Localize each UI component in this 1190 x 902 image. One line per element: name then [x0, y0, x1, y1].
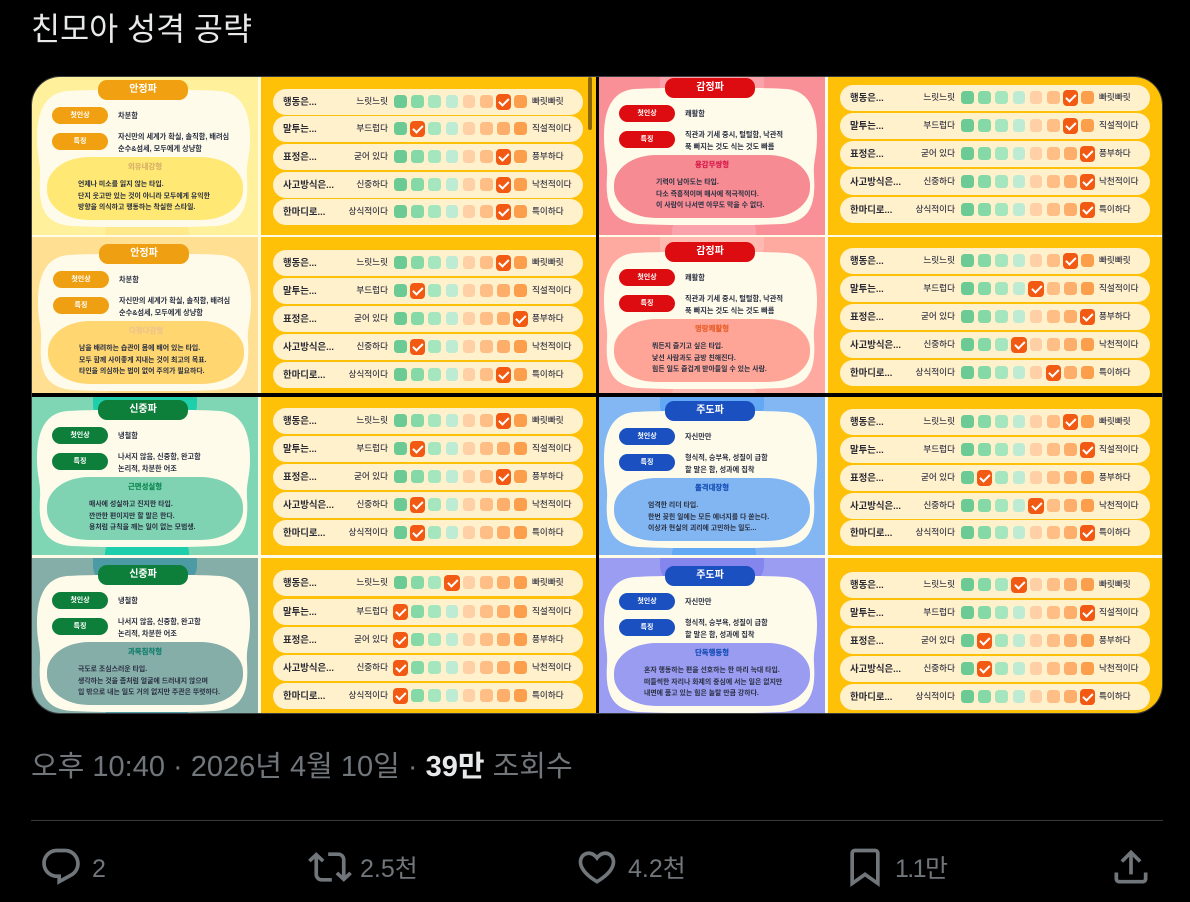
rating row: 한마디로 [273, 362, 583, 388]
rating row: 표정은: 풍부하다 [532, 471, 564, 481]
rating row: 행동은 [840, 572, 1150, 598]
panel: 안정파 다정다감형 profile: 타인을 의심하는 법이 없어 주의가 필요하다. [79, 368, 205, 375]
rating row: 한마디로: 특이하다 [1099, 527, 1131, 537]
panel: 주도파 단독행동형 profile: 특징 [641, 624, 653, 631]
rating row: 한마디로: 특이하다 [532, 527, 564, 537]
icon: bookmark [850, 848, 880, 887]
rating row: 표정은: 풍부하다 [1099, 148, 1131, 158]
rating row: 한마디로: 특이하다 [1099, 367, 1131, 377]
panel: 신중파 과묵침착형 ratings [261, 558, 596, 713]
panel: 신중파 과묵침착형 profile: 극도로 조심스러운 타입. [78, 666, 147, 673]
panel: 신중파 근면성실형 profile: 특징 [74, 458, 86, 465]
rating row: 한마디로: 한마디로... [283, 206, 325, 217]
rating row: 행동은: 행동은... [850, 92, 884, 103]
rating row: 행동은: 빠릿빠릿 [532, 257, 564, 267]
panel: 안정파 다정다감형 profile: 첫인상 [71, 276, 91, 283]
panel: 신중파 근면성실형 profile: 깐깐한 편이지만 할 말은 한다. [89, 513, 175, 520]
rating row: 한마디로: 특이하다 [532, 369, 564, 379]
panel: 감정파 용감무쌍형 profile: 푹 빠지는 것도 식는 것도 빠름 [685, 142, 774, 150]
rating row: 한마디로 [840, 197, 1150, 223]
panel: 감정파 명랑쾌활형 profile [599, 237, 825, 393]
rating row: 표정은: 표정은... [283, 471, 317, 482]
rating row: 표정은: 풍부하다 [1099, 311, 1131, 321]
panel: 감정파 명랑쾌활형 profile: 특징 [641, 300, 653, 307]
like count: 4.2천 [628, 855, 686, 883]
panel: 안정파 외유내강형 profile [32, 77, 258, 235]
rating row: 말투는 [840, 437, 1150, 463]
rating row: 행동은 [273, 408, 583, 434]
rating row: 사고방식은: 신중하다 [923, 176, 955, 186]
rating row: 행동은: 행동은... [850, 579, 884, 590]
panel: 감정파 명랑쾌활형 profile: 낯선 사람과도 금방 친해진다. [652, 355, 736, 362]
panel: 감정파 용감무쌍형 profile [599, 77, 825, 235]
panel: 안정파 다정다감형 profile [32, 237, 258, 393]
rating row: 한마디로: 상식적이다 [348, 369, 388, 379]
rating row: 표정은: 굳어 있다 [921, 148, 955, 158]
rating row: 표정은 [840, 141, 1150, 167]
rating row: 한마디로: 상식적이다 [348, 206, 388, 216]
rating row: 사고방식은 [273, 655, 583, 681]
rating row: 표정은 [273, 464, 583, 490]
rating row: 표정은: 표정은... [850, 472, 884, 483]
panel: 주도파 단독행동형 profile [599, 558, 825, 713]
panel: 주도파 단독행동형 profile: 주도파 [696, 570, 724, 581]
rating row: 말투는: 부드럽다 [356, 285, 388, 295]
rating row: 사고방식은: 신중하다 [923, 663, 955, 673]
panel: 신중파 과묵침착형 profile: 과묵침착형 [128, 647, 162, 656]
panel: 안정파 다정다감형 profile: 차분함 [119, 275, 139, 284]
panel: 주도파 단독행동형 profile: 자신만만 [685, 597, 711, 606]
panel: 감정파 명랑쾌활형 profile: 감정파 [696, 246, 724, 257]
panel: 감정파 용감무쌍형 profile: 감정파 [696, 82, 724, 93]
rating row: 말투는 [840, 113, 1150, 139]
panel: 감정파 용감무쌍형 profile: 기력이 남아도는 타입. [656, 179, 719, 186]
rating row: 표정은: 표정은... [283, 151, 317, 162]
icon: like [578, 851, 616, 884]
rating row: 사고방식은 [273, 334, 583, 360]
rating row: 표정은 [840, 465, 1150, 491]
rating row: 말투는: 부드럽다 [923, 120, 955, 130]
rating row: 사고방식은: 신중하다 [356, 499, 388, 509]
panel: 안정파 외유내강형 ratings [261, 77, 596, 235]
rating row: 사고방식은: 낙천적이다 [532, 341, 572, 351]
rating row: 사고방식은 [840, 656, 1150, 682]
panel: 안정파 외유내강형 profile: 순수&섬세, 모두에게 상냥함 [118, 144, 202, 152]
timestamp and views: 오후 10:40 · 2026년 4월 10일 · 39만 조회수 [31, 751, 573, 783]
rating row: 말투는: 말투는... [850, 120, 884, 131]
rating row: 표정은: 풍부하다 [532, 634, 564, 644]
rating row: 말투는 [840, 276, 1150, 302]
rating row: 표정은 [273, 144, 583, 170]
rating row: 말투는: 직설적이다 [1099, 120, 1139, 130]
rating row: 사고방식은 [840, 169, 1150, 195]
panel: 감정파 명랑쾌활형 profile: 명랑쾌활형 [695, 324, 729, 333]
rating row: 행동은: 느릿느릿 [356, 577, 388, 587]
rating row: 행동은 [273, 570, 583, 596]
panel: 감정파 용감무쌍형 profile: 첫인상 [637, 110, 657, 117]
panel: 감정파 명랑쾌활형 ratings [828, 237, 1162, 393]
rating row: 한마디로: 특이하다 [532, 690, 564, 700]
rating row: 사고방식은: 신중하다 [356, 179, 388, 189]
panel: 신중파 과묵침착형 profile: 신중파 [129, 569, 157, 580]
rating row: 말투는: 말투는... [850, 283, 884, 294]
rating row: 한마디로: 특이하다 [1099, 691, 1131, 701]
rating row: 사고방식은: 신중하다 [356, 662, 388, 672]
rating row: 말투는 [273, 116, 583, 142]
rating row: 행동은: 행동은... [283, 257, 317, 268]
panel: 신중파 근면성실형 profile: 용처럼 규칙을 깨는 일이 없는 모범생. [89, 524, 196, 531]
panel: 주도파 돌격대장형 profile: 돌격대장형 [695, 483, 729, 492]
rating row: 행동은: 빠릿빠릿 [1099, 92, 1131, 102]
rating row: 행동은: 행동은... [850, 255, 884, 266]
panel: 감정파 용감무쌍형 profile: 직관과 기세 중시, 털털함, 낙관적 [685, 130, 783, 139]
rating row: 행동은: 빠릿빠릿 [532, 415, 564, 425]
panel: 안정파 다정다감형 profile: 자신만의 세계가 확실, 솔직함, 배려심 [119, 296, 230, 305]
rating row: 표정은: 표정은... [850, 311, 884, 322]
panel: 신중파 과묵침착형 profile: 특징 [74, 623, 86, 630]
rating row: 말투는: 부드럽다 [923, 607, 955, 617]
reply count: 2 [92, 855, 106, 883]
panel: 안정파 외유내강형 profile: 첫인상 [70, 112, 90, 119]
rating row: 사고방식은: 사고방식은... [283, 341, 334, 352]
rating row: 말투는: 말투는... [283, 285, 317, 296]
rating row: 행동은: 빠릿빠릿 [532, 96, 564, 106]
rating row: 표정은: 표정은... [850, 635, 884, 646]
rating row: 표정은: 풍부하다 [532, 313, 564, 323]
rating row: 행동은 [840, 85, 1150, 111]
rating row: 행동은: 느릿느릿 [923, 579, 955, 589]
panel: 안정파 외유내강형 profile: 차분함 [118, 111, 138, 120]
rating row: 표정은: 굳어 있다 [921, 311, 955, 321]
panel: 신중파 과묵침착형 profile: 논리적, 차분한 어조 [118, 628, 177, 638]
panel: 안정파 다정다감형 profile: 순수&섬세, 모두에게 상냥함 [119, 308, 203, 316]
rating row: 한마디로: 특이하다 [1099, 204, 1131, 214]
rating row: 행동은 [840, 409, 1150, 435]
panel: 주도파 단독행동형 profile: 첫인상 [637, 598, 657, 605]
rating row: 한마디로 [840, 360, 1150, 386]
panel: 안정파 다정다감형 profile: 모두 함께 사이좋게 지내는 것이 최고의 목표. [79, 357, 207, 364]
image grid [32, 77, 1162, 713]
rating row: 말투는 [273, 599, 583, 625]
rating row: 한마디로: 한마디로... [850, 204, 892, 215]
rating row: 한마디로: 상식적이다 [348, 527, 388, 537]
rating row: 말투는: 직설적이다 [1099, 283, 1139, 293]
panel: 신중파 과묵침착형 profile: 입 밖으로 내는 일도 거의 없지만 주관은 뚜렷하다. [78, 689, 220, 696]
rating row: 말투는: 직설적이다 [1099, 444, 1139, 454]
scrollbar [588, 77, 592, 130]
rating row: 말투는: 말투는... [283, 123, 317, 134]
rating row: 한마디로: 한마디로... [850, 691, 892, 702]
panel: 주도파 돌격대장형 profile: 엄격한 리더 타입. [648, 502, 698, 509]
rating row: 말투는: 말투는... [283, 443, 317, 454]
rating row: 사고방식은: 낙천적이다 [1099, 663, 1139, 673]
rating row: 말투는: 직설적이다 [532, 606, 572, 616]
panel: 안정파 외유내강형 profile: 언제나 미소를 잃지 않는 타입. [78, 181, 164, 188]
rating row: 한마디로: 상식적이다 [915, 204, 955, 214]
panel: 안정파 외유내강형 profile: 자신만의 세계가 확실, 솔직함, 배려심 [118, 132, 229, 141]
rating row: 표정은: 표정은... [850, 148, 884, 159]
rating row: 표정은 [840, 304, 1150, 330]
repost count: 2.5천 [360, 855, 418, 883]
rating row: 표정은: 표정은... [283, 313, 317, 324]
panel: 감정파 명랑쾌활형 profile: 뭐든지 즐기고 싶은 타입. [652, 343, 723, 350]
panel: 안정파 다정다감형 profile: 안정파 [130, 248, 158, 259]
rating row: 한마디로 [273, 683, 583, 709]
rating row: 행동은: 행동은... [283, 577, 317, 588]
rating row: 사고방식은: 사고방식은... [850, 176, 901, 187]
panel: 신중파 과묵침착형 profile: 냉철함 [118, 596, 138, 605]
rating row: 사고방식은 [273, 172, 583, 198]
panel: 주도파 돌격대장형 profile: 첫인상 [637, 433, 657, 440]
rating row: 한마디로: 상식적이다 [915, 367, 955, 377]
icon: repost [308, 852, 352, 882]
rating row: 행동은 [273, 89, 583, 115]
rating row: 표정은 [840, 628, 1150, 654]
rating row: 행동은: 빠릿빠릿 [1099, 579, 1131, 589]
panel: 주도파 돌격대장형 profile [599, 397, 825, 555]
rating row: 행동은: 느릿느릿 [923, 255, 955, 265]
panel: 신중파 근면성실형 profile: 냉철함 [118, 431, 138, 440]
rating row: 행동은: 행동은... [850, 416, 884, 427]
rating row: 말투는: 말투는... [850, 607, 884, 618]
rating row: 한마디로: 한마디로... [283, 527, 325, 538]
panel: 감정파 명랑쾌활형 profile: 쾌활함 [685, 273, 705, 282]
rating row: 행동은: 느릿느릿 [356, 257, 388, 267]
rating row: 표정은 [273, 627, 583, 653]
panel: 주도파 돌격대장형 profile: 한번 꽂힌 일에는 모든 에너지를 다 쏟는다. [648, 514, 769, 521]
rating row: 표정은: 굳어 있다 [921, 472, 955, 482]
panel: 신중파 근면성실형 profile: 신중파 [129, 404, 157, 415]
panel: 감정파 용감무쌍형 profile: 용감무쌍형 [695, 160, 729, 169]
rating row: 사고방식은: 낙천적이다 [532, 662, 572, 672]
rating row: 한마디로: 상식적이다 [348, 690, 388, 700]
rating row: 말투는: 직설적이다 [532, 285, 572, 295]
panel: 안정파 다정다감형 profile: 다정다감형 [129, 326, 163, 335]
panel: 주도파 단독행동형 profile: 단독행동형 [695, 648, 729, 657]
rating row: 행동은 [273, 250, 583, 276]
panel: 감정파 명랑쾌활형 profile: 힘든 일도 즐겁게 받아들일 수 있는 사람. [652, 366, 767, 373]
rating row: 사고방식은: 신중하다 [356, 341, 388, 351]
bookmark count: 1.1만 [895, 855, 946, 883]
panel: 주도파 돌격대장형 profile: 할 말은 함, 성과에 집착 [685, 464, 754, 474]
panel: 신중파 근면성실형 profile: 논리적, 차분한 어조 [118, 464, 177, 472]
panel: 감정파 용감무쌍형 profile: 쾌활함 [685, 109, 705, 118]
rating row: 사고방식은: 신중하다 [923, 339, 955, 349]
rating row: 말투는 [273, 278, 583, 304]
panel: 안정파 외유내강형 profile: 안정파 [129, 84, 157, 95]
rating row: 한마디로: 한마디로... [850, 367, 892, 378]
panel: 주도파 돌격대장형 ratings [828, 397, 1162, 555]
rating row: 행동은: 빠릿빠릿 [1099, 255, 1131, 265]
panel: 감정파 용감무쌍형 profile: 다소 즉흥적이며 매사에 적극적이다. [656, 191, 759, 198]
rating row: 사고방식은: 사고방식은... [850, 500, 901, 511]
panel: 신중파 근면성실형 profile: 매사에 성실하고 진지한 타입. [89, 501, 173, 508]
rating row: 행동은: 행동은... [283, 415, 317, 426]
panel: 안정파 외유내강형 profile: 외유내강형 [128, 162, 162, 171]
panel: 신중파 근면성실형 profile [32, 397, 258, 555]
rating row: 한마디로: 한마디로... [283, 690, 325, 701]
panel: 주도파 돌격대장형 profile: 주도파 [696, 405, 724, 416]
rating row: 한마디로: 한마디로... [283, 369, 325, 380]
rating row: 한마디로: 상식적이다 [915, 527, 955, 537]
rating row: 사고방식은 [840, 493, 1150, 519]
rating row: 표정은: 표정은... [283, 634, 317, 645]
rating row: 말투는: 직설적이다 [1099, 607, 1139, 617]
rating row: 말투는: 부드럽다 [356, 123, 388, 133]
panel: 주도파 단독행동형 profile: 형식적, 승부욕, 성질이 급함 [685, 618, 768, 627]
icon: reply [42, 848, 80, 885]
rating row: 말투는 [273, 436, 583, 462]
rating row: 사고방식은: 사고방식은... [850, 339, 901, 350]
rating row: 표정은: 굳어 있다 [354, 471, 388, 481]
rating row: 행동은: 느릿느릿 [356, 415, 388, 425]
rating row: 행동은: 행동은... [283, 96, 317, 107]
rating row: 사고방식은: 낙천적이다 [1099, 339, 1139, 349]
icon: share [1114, 850, 1148, 884]
panel: 주도파 돌격대장형 profile: 이상과 현실의 괴리에 고민하는 일도... [648, 525, 756, 532]
rating row: 표정은: 굳어 있다 [354, 634, 388, 644]
panel: 주도파 단독행동형 profile: 혼자 행동하는 편을 선호하는 한 마리 늑대 타입. [644, 667, 780, 674]
image grid border [31, 76, 1163, 714]
panel: 주도파 단독행동형 profile: 할 말은 함, 성과에 집착 [685, 630, 754, 638]
rating row: 행동은: 느릿느릿 [923, 92, 955, 102]
rating row: 말투는: 부드럽다 [923, 283, 955, 293]
panel: 신중파 근면성실형 profile: 근면성실형 [128, 482, 162, 491]
rating row: 표정은: 굳어 있다 [354, 313, 388, 323]
panel: 감정파 명랑쾌활형 profile: 직관과 기세 중시, 털털함, 낙관적 [685, 294, 783, 303]
rating row: 말투는: 부드럽다 [356, 606, 388, 616]
rating row: 행동은 [840, 248, 1150, 274]
panel: 주도파 돌격대장형 profile: 특징 [641, 459, 653, 466]
rating row: 사고방식은: 낙천적이다 [1099, 176, 1139, 186]
rating row: 사고방식은: 낙천적이다 [1099, 500, 1139, 510]
panel: 신중파 과묵침착형 profile: 첫인상 [70, 597, 90, 604]
panel: 주도파 돌격대장형 profile: 형식적, 승부욕, 성질이 급함 [685, 453, 768, 462]
panel: 주도파 단독행동형 profile: 내면에 품고 있는 힘은 놀랄 만큼 강하다. [644, 690, 759, 697]
rating row: 한마디로 [840, 520, 1150, 546]
panel: 감정파 용감무쌍형 ratings [828, 77, 1162, 235]
panel: 신중파 근면성실형 profile: 첫인상 [70, 432, 90, 439]
rating row: 표정은: 굳어 있다 [354, 151, 388, 161]
panel: 안정파 다정다감형 profile: 남을 배려하는 습관이 몸에 배어 있는 타입. [79, 345, 200, 352]
rating row: 표정은: 풍부하다 [1099, 472, 1131, 482]
panel: 감정파 명랑쾌활형 profile: 푹 빠지는 것도 식는 것도 빠름 [685, 306, 774, 314]
rating row: 사고방식은: 사고방식은... [283, 499, 334, 510]
panel: 주도파 단독행동형 profile: 떠들썩한 자리나 화제의 중심에 서는 일은 없지만 [644, 679, 782, 686]
rating row: 사고방식은: 사고방식은... [283, 662, 334, 673]
panel: 주도파 돌격대장형 profile: 자신만만 [685, 432, 711, 441]
panel: 주도파 단독행동형 ratings [828, 558, 1162, 713]
panel: 안정파 외유내강형 profile: 특징 [74, 138, 86, 145]
rating row: 한마디로 [840, 684, 1150, 710]
panel: 안정파 외유내강형 profile: 방향을 의식하고 행동하는 착실한 스타일. [78, 204, 195, 211]
title: 친모아 성격 공략 [31, 11, 252, 47]
rating row: 사고방식은: 신중하다 [923, 500, 955, 510]
rating row: 행동은: 느릿느릿 [923, 416, 955, 426]
panel: 감정파 용감무쌍형 profile: 특징 [641, 136, 653, 143]
rating row: 말투는: 말투는... [850, 444, 884, 455]
rating row: 한마디로 [273, 199, 583, 225]
rating row: 사고방식은: 사고방식은... [850, 663, 901, 674]
rating row: 한마디로: 상식적이다 [915, 691, 955, 701]
rating row: 말투는 [840, 600, 1150, 626]
rating row: 사고방식은 [273, 492, 583, 518]
rating row: 한마디로 [273, 520, 583, 546]
panel: 신중파 과묵침착형 profile [32, 558, 258, 713]
rating row: 한마디로: 특이하다 [532, 206, 564, 216]
rating row: 표정은: 풍부하다 [1099, 635, 1131, 645]
rating row: 사고방식은 [840, 332, 1150, 358]
rating row: 말투는: 부드럽다 [923, 444, 955, 454]
rating row: 한마디로: 한마디로... [850, 527, 892, 538]
panel: 신중파 과묵침착형 profile: 생각하는 것을 좀처럼 얼굴에 드러내지 않으며 [78, 678, 208, 685]
panel: 안정파 외유내강형 profile: 단지 웃고만 있는 것이 아니라 모두에게 유익한 [78, 193, 210, 200]
panel: 감정파 용감무쌍형 profile: 이 사람이 나서면 아무도 막을 수 없다. [656, 202, 764, 209]
panel: 신중파 과묵침착형 profile: 나서지 않음, 신중함, 완고함 [118, 617, 201, 626]
panel: 신중파 근면성실형 profile: 나서지 않음, 신중함, 완고함 [118, 452, 201, 461]
panel: 신중파 근면성실형 ratings [261, 397, 596, 555]
panel: 안정파 다정다감형 profile: 특징 [75, 302, 87, 309]
rating row: 행동은: 빠릿빠릿 [532, 577, 564, 587]
rating row: 행동은: 느릿느릿 [356, 96, 388, 106]
rating row: 말투는: 말투는... [283, 606, 317, 617]
rating row: 말투는: 직설적이다 [532, 123, 572, 133]
rating row: 사고방식은: 사고방식은... [283, 179, 334, 190]
rating row: 표정은 [273, 306, 583, 332]
rating row: 행동은: 빠릿빠릿 [1099, 416, 1131, 426]
rating row: 사고방식은: 낙천적이다 [532, 179, 572, 189]
rating row: 말투는: 부드럽다 [356, 443, 388, 453]
rating row: 말투는: 직설적이다 [532, 443, 572, 453]
rating row: 표정은: 풍부하다 [532, 151, 564, 161]
rating row: 사고방식은: 낙천적이다 [532, 499, 572, 509]
rating row: 표정은: 굳어 있다 [921, 635, 955, 645]
panel: 감정파 명랑쾌활형 profile: 첫인상 [637, 274, 657, 281]
panel: 안정파 다정다감형 ratings [261, 237, 596, 393]
